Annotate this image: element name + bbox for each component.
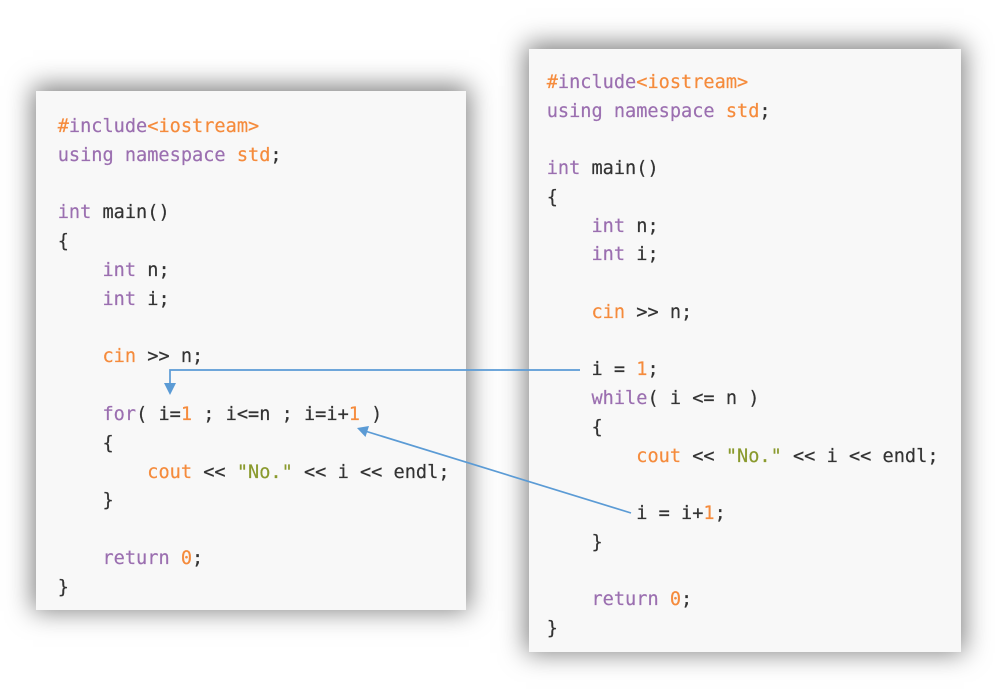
code block: for loop: #include<iostream> using namespace std; int main() { int n; int i; cin >> n; for( i=1 ; i<=n ; i=i+1 ) { cout << "No." << i << endl; } return 0; }: [58, 116, 450, 598]
arrow: i = 1 to for initializer: [164, 370, 580, 395]
panel: while loop code: [529, 49, 961, 652]
panel: for loop code: [36, 91, 466, 610]
code block: while loop: #include<iostream> using namespace std; int main() { int n; int i; cin >> n; i = 1; while( i <= n ) { cout << "No." << i << endl; i = i+1; } return 0; }: [547, 72, 939, 639]
arrow: i = i+1 to for increment: [357, 426, 631, 513]
